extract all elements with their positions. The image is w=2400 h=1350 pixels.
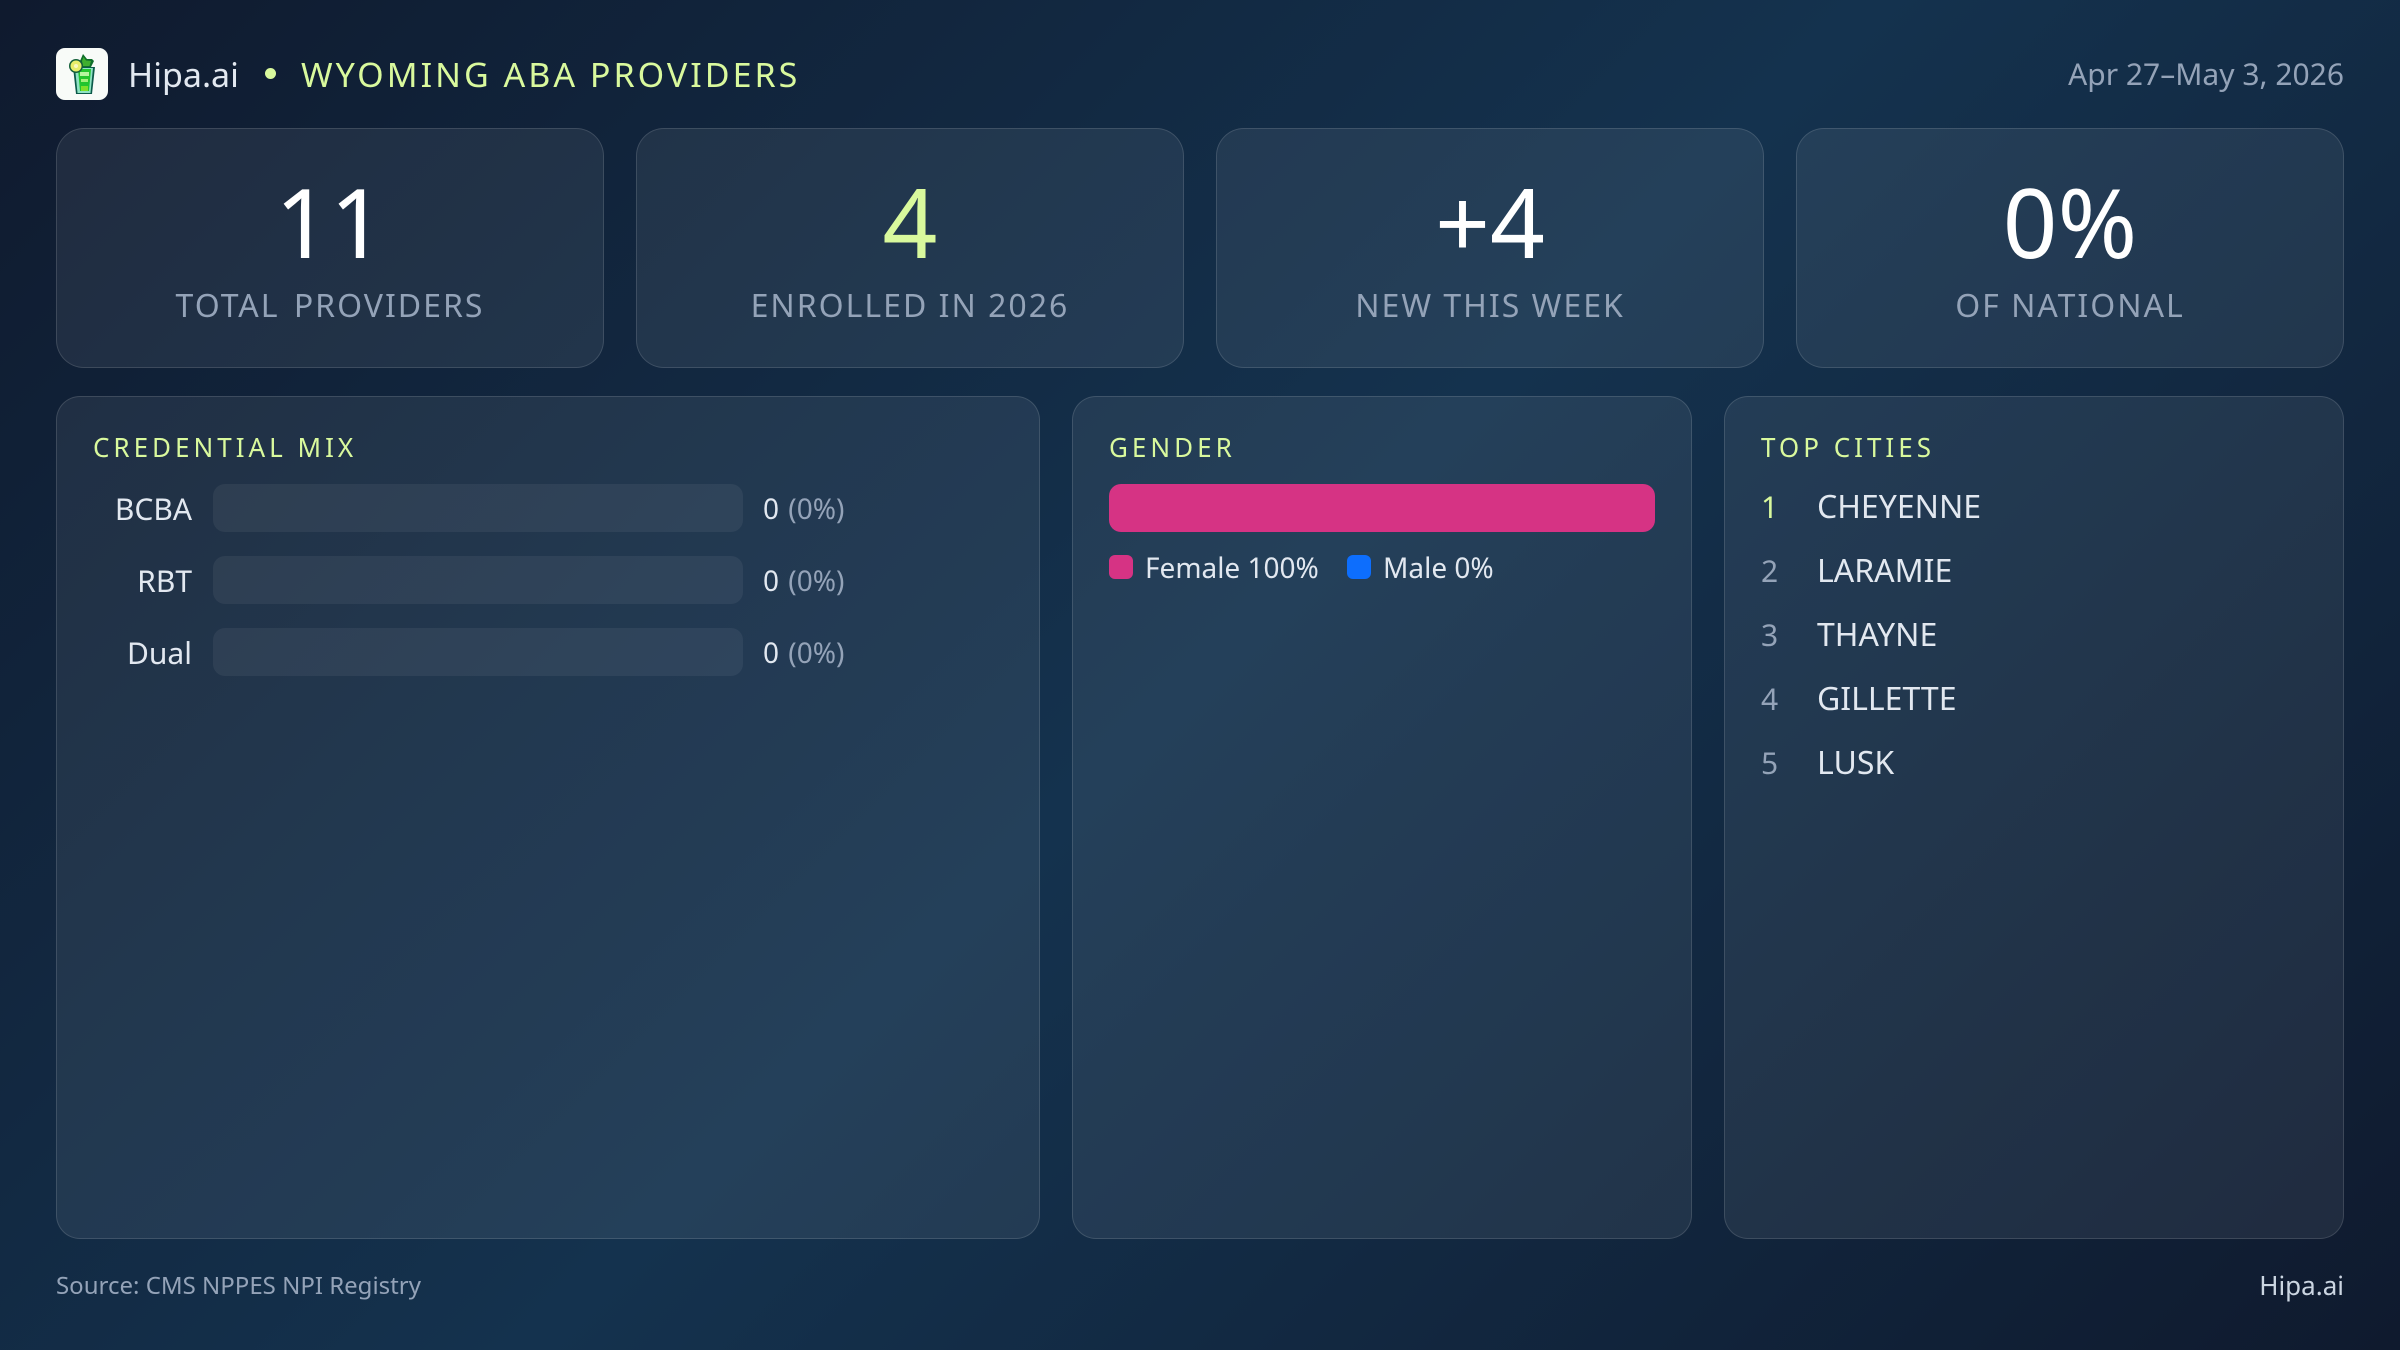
city rank 5 [1761,741,1894,784]
value: 4 [883,156,937,287]
report title: WYOMING ABA PROVIDERS [301,51,800,97]
date range: Apr 27–May 3, 2026 [2068,53,2344,94]
swatch: female [1109,555,1133,579]
footer source: Source: CMS NPPES NPI Registry [56,1269,421,1302]
label: OF NATIONAL [1955,284,2185,327]
value: 0 (0%) [763,634,844,672]
label: RBT [137,560,192,601]
city rank 3 [1761,613,1937,656]
stat card: enrolled in 2026 [636,128,1184,368]
value: 0% [2003,156,2137,287]
label: NEW THIS WEEK [1355,284,1625,327]
header: brand and title [56,48,800,100]
row: BCBA [115,484,844,532]
city rank 4 [1761,677,1956,720]
city rank 2 [1761,549,1952,592]
stat card: total providers [56,128,604,368]
value: 0 (0%) [763,490,844,528]
rank: 3 [1761,614,1778,655]
brand name: Hipa.ai [128,51,239,97]
heading: TOP CITIES [1761,429,1935,465]
legend [1109,549,1494,587]
empty bar [213,556,743,604]
value: 11 [275,156,385,287]
rank: 5 [1761,742,1778,783]
legend text: female: Female 100% [1145,549,1319,587]
row: Dual [127,628,844,676]
legend text: male: Male 0% [1383,549,1494,587]
city: THAYNE [1817,613,1937,656]
heading: CREDENTIAL MIX [93,429,357,465]
label: BCBA [115,488,192,529]
rank: 1 [1761,486,1778,527]
icon: green drink logo [56,48,108,100]
footer brand: Hipa.ai [2259,1267,2344,1303]
panel: gender [1072,396,1692,1239]
label: TOTAL PROVIDERS [176,284,484,327]
separator dot [265,68,276,79]
row: RBT [137,556,844,604]
gender bar: female 100% [1109,484,1655,532]
label: ENROLLED IN 2026 [751,284,1069,327]
heading: GENDER [1109,429,1236,465]
stat card: of national [1796,128,2344,368]
stat card: new this week [1216,128,1764,368]
value: 0 (0%) [763,562,844,600]
rank: 4 [1761,678,1778,719]
value: +4 [1435,156,1545,287]
rank: 2 [1761,550,1778,591]
empty bar [213,628,743,676]
city rank 1 [1761,485,1981,528]
city: LUSK [1817,741,1894,784]
city: GILLETTE [1817,677,1956,720]
city: CHEYENNE [1817,485,1981,528]
swatch: male [1347,555,1371,579]
panel: top cities [1724,396,2344,1239]
label: Dual [127,632,192,673]
empty bar [213,484,743,532]
panel: credential mix [56,396,1040,1239]
city: LARAMIE [1817,549,1952,592]
